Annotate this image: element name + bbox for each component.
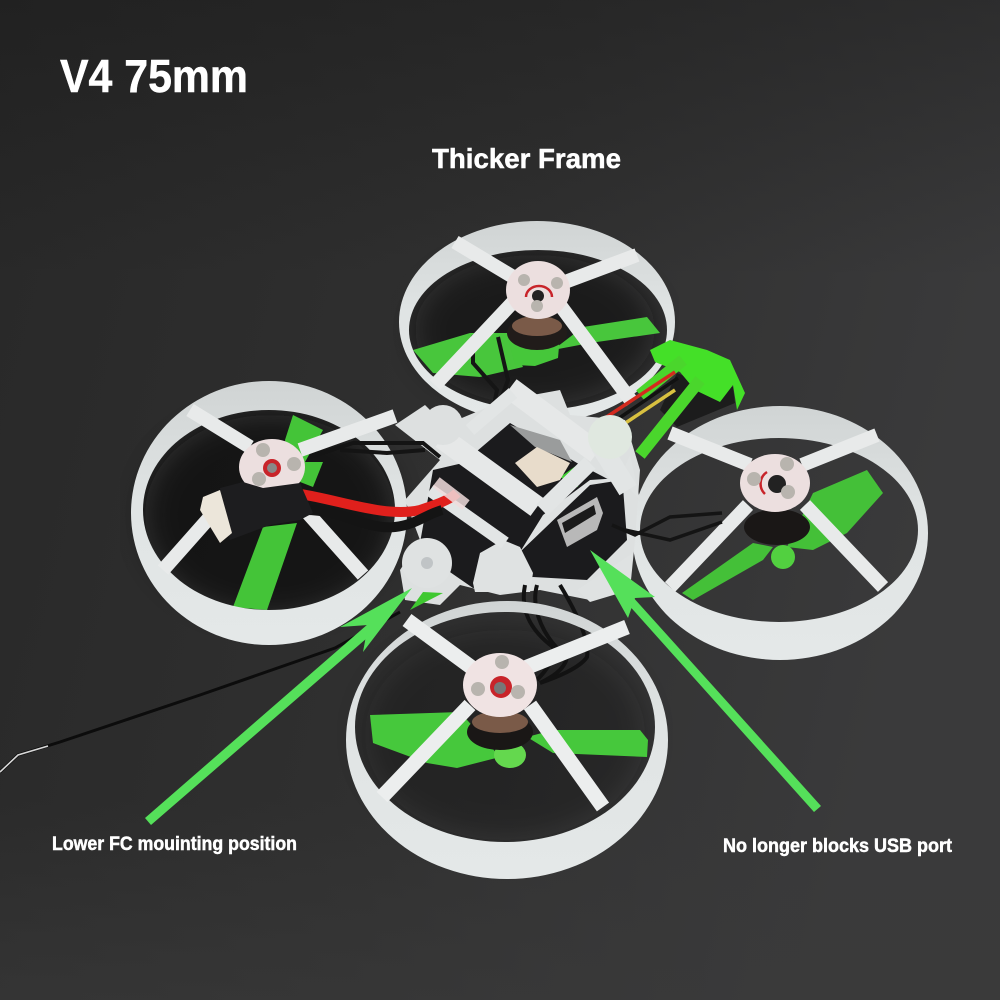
propeller: bottom: [370, 712, 648, 768]
duct: top: [399, 221, 675, 423]
propeller: right: [682, 470, 883, 600]
camera mount and battery strap: [605, 340, 745, 455]
label: thicker frame: Thicker Frame: [432, 143, 621, 174]
antenna wire: [0, 612, 400, 772]
duct: left: [131, 381, 407, 645]
arrow: USB port: [590, 550, 821, 812]
wires: left motor: [310, 443, 440, 457]
label: USB port: No longer blocks USB port: [723, 836, 953, 857]
battery connector and cable: [200, 482, 466, 543]
wires: bottom motor: [524, 585, 587, 683]
duct: right: [632, 406, 928, 660]
propeller: top: [413, 317, 660, 377]
duct: bottom: [346, 601, 668, 879]
arrow: FC mounting: [145, 588, 412, 825]
motor: bottom: [467, 711, 533, 750]
motor: right: [744, 509, 810, 545]
wires: right motor: [612, 513, 722, 540]
propeller: left: [233, 415, 323, 610]
wires: top motor: [473, 307, 508, 410]
flight controller frame and board: [395, 388, 640, 610]
label: FC position: Lower FC mouinting position: [52, 834, 297, 855]
motor: top: [507, 316, 567, 350]
title: V4 75mm: [60, 50, 248, 102]
